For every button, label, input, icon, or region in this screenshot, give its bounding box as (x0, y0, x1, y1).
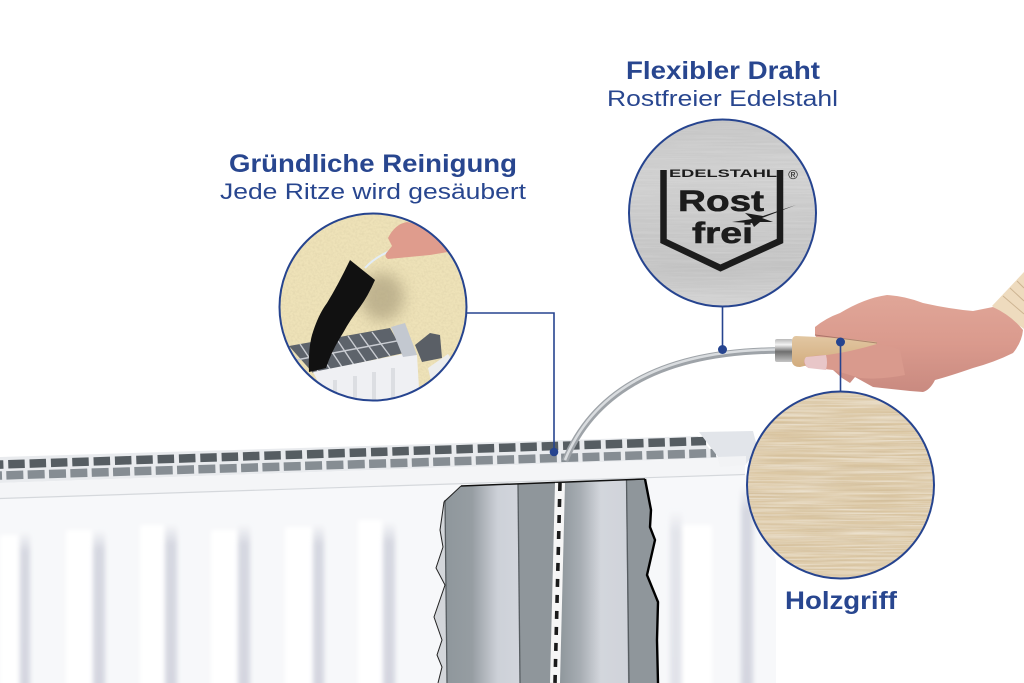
circle outline (629, 120, 816, 306)
Rostfrei logo: Rost (678, 185, 764, 218)
heading: thorough cleaning (220, 150, 526, 204)
wooden handle (792, 336, 877, 367)
grill surface (0, 436, 718, 483)
heading: flexible wire (607, 57, 838, 111)
wall background (279, 213, 467, 401)
heading: flexible wire: Flexibler Draht (626, 57, 821, 85)
connector: handle (836, 338, 845, 391)
connector: wire (718, 307, 727, 354)
heading: thorough cleaning: Gründliche Reinigung (229, 150, 517, 178)
thin wire (364, 250, 388, 268)
radiator body (0, 474, 776, 683)
hand (815, 295, 1023, 392)
metal ferrule (775, 339, 793, 362)
fingernail (804, 355, 827, 370)
twisted wire (555, 483, 560, 683)
brushed metal (628, 119, 818, 309)
flexible wire (565, 350, 775, 461)
fingers (386, 222, 448, 259)
circle: stainless steel badge (628, 119, 818, 309)
brush shadow (360, 273, 404, 321)
grill slots: lower row (0, 453, 716, 476)
grill slots: upper row (0, 441, 706, 465)
finger shadow (815, 335, 877, 343)
front rail (0, 457, 745, 498)
valve (415, 333, 450, 380)
Rostfrei logo (664, 167, 798, 268)
connector: cleaning (467, 313, 558, 456)
heading: flexible wire: Rostfreier Edelstahl (607, 86, 838, 111)
sleeve (992, 272, 1024, 329)
circle outline (747, 392, 934, 578)
cutaway view (434, 479, 658, 683)
circle: thorough cleaning (279, 213, 467, 405)
hand holding wooden handle (775, 272, 1024, 392)
Rostfrei logo: frei (692, 217, 753, 250)
Rostfrei logo: ® (788, 167, 798, 182)
radiator fins (0, 485, 753, 683)
black brush (309, 260, 375, 372)
circle: wood texture (746, 391, 936, 581)
heading: wooden handle: Holzgriff (785, 587, 898, 615)
heading: thorough cleaning: Jede Ritze wird gesäubert (220, 179, 526, 204)
radiator (0, 431, 776, 683)
index finger (804, 344, 905, 379)
Rostfrei logo: EDELSTAHL (669, 168, 777, 180)
end cap (699, 431, 758, 466)
circle outline (280, 214, 466, 400)
small radiator (289, 323, 420, 405)
